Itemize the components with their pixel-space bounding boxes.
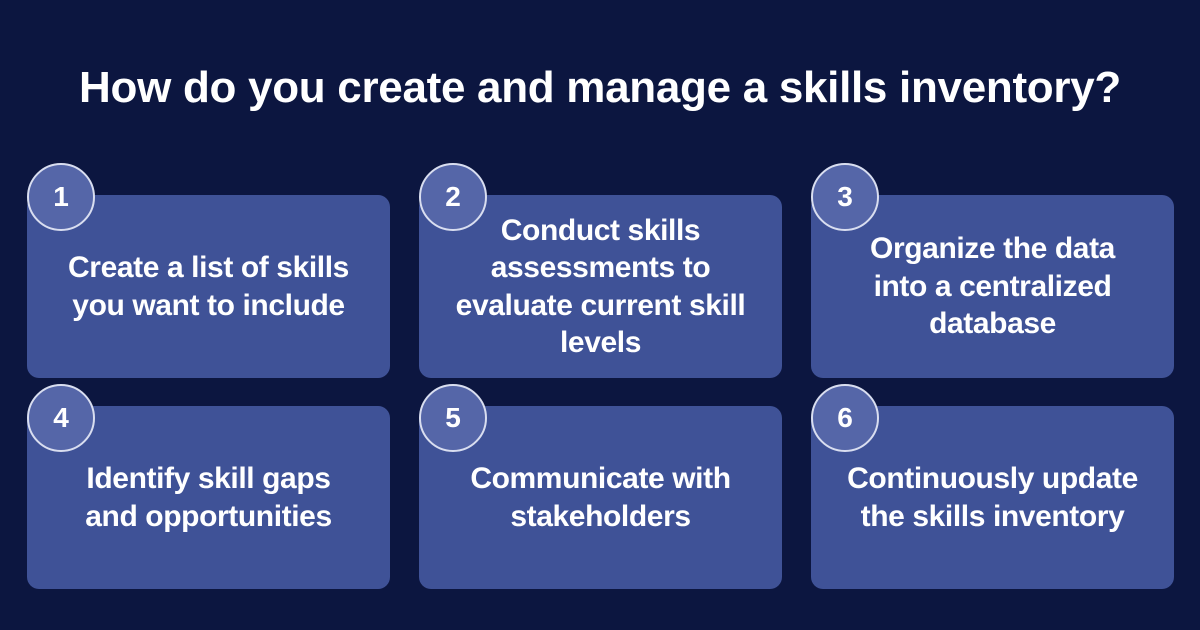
card 2: Conduct skills assessments to evaluate current skill levels — [456, 214, 745, 359]
badge 5: 5 — [445, 402, 461, 433]
title: How do you create and manage a skills inventory? — [79, 63, 1121, 112]
card 3 — [811, 195, 1174, 378]
card 6: Continuously update the skills inventory — [847, 462, 1138, 532]
badge 5 — [419, 384, 487, 452]
card 2 — [419, 195, 782, 378]
badge 4: 4 — [53, 402, 69, 433]
badge 4 — [27, 384, 95, 452]
card 5: Communicate with stakeholders — [470, 462, 731, 532]
badge 6: 6 — [837, 402, 853, 433]
badge 6 — [811, 384, 879, 452]
card 5 — [419, 406, 782, 589]
badge 3: 3 — [837, 181, 853, 212]
badge 1 — [27, 163, 95, 231]
card 4 — [27, 406, 390, 589]
card 1 — [27, 195, 390, 378]
badge 3 — [811, 163, 879, 231]
badge 2: 2 — [445, 181, 461, 212]
badge 2 — [419, 163, 487, 231]
card 4: Identify skill gaps and opportunities — [85, 462, 332, 532]
card 3: Organize the data into a centralized database — [870, 232, 1115, 340]
card 1: Create a list of skills you want to include — [68, 251, 349, 322]
badge 1: 1 — [53, 181, 69, 212]
card 6 — [811, 406, 1174, 589]
